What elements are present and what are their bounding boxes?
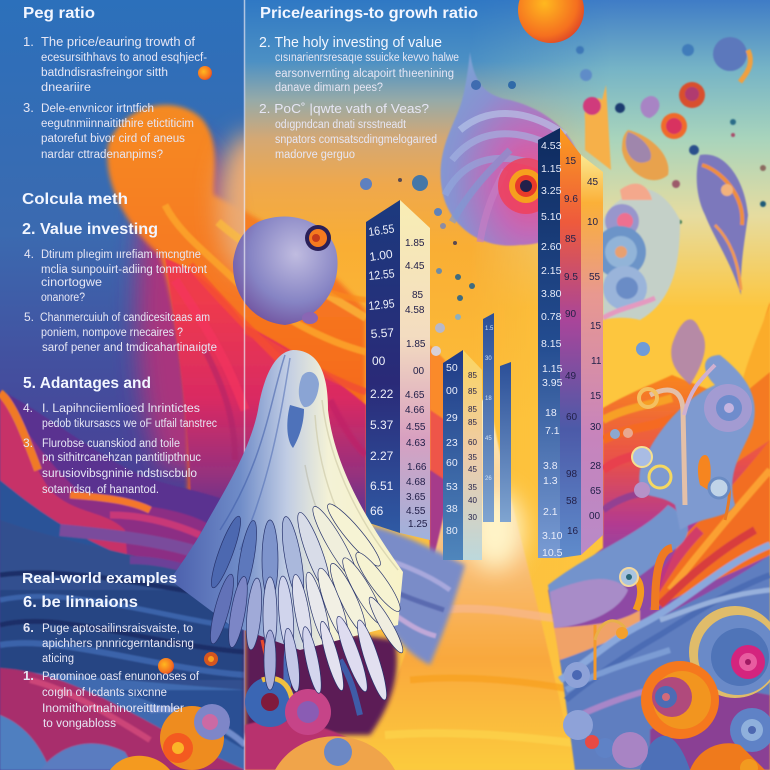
tower 3 thin: 26 [485,476,492,482]
tower 2 with figures: 85 [468,405,477,414]
landscape: left purple and blue hills [0,390,245,770]
tree on the blue hill [586,319,755,530]
text block: item 3 advantages: Flurobse cuanskiod and toile [42,438,180,450]
text block: item 4 advantages: pedob tikursascs we oF utfail tanstrec [42,418,217,430]
tower 1 with figures: 16.55 [367,221,395,239]
tower 5 tall with figures: 18 [545,407,557,419]
tower 5 tall with figures: 2.15 [541,265,562,277]
tower 1 with figures: 1.85 [405,238,425,249]
text block: item 3: patorefut bivor cird of aneus [41,133,185,145]
text block: first paragraph: cısınarienrsresaqıe ssuicke kevvo halwe [275,52,459,64]
text block: second paragraph: odıgpndcan dnati srsstneadt [275,119,407,131]
tower 2 with figures: 35 [468,483,477,492]
tower 1 with figures: 1.85 [406,339,426,350]
text block: item 3: nardar cttradenanpims? [41,149,163,161]
text block: item 6 [23,620,194,665]
neck [287,405,304,448]
heading: value investing: 2. Value investing [22,221,158,238]
tower 3 thin: 45 [485,436,492,442]
ground under the figure [245,620,397,770]
tower 2 with figures: 60 [468,438,477,447]
tower 5 tall with figures: 3.80 [541,288,562,300]
tower 5 tall with figures: 1.3 [543,475,558,487]
text block: item 1: batdndisrasfreingor sitth [41,67,168,79]
figure with long hair and feathers [170,350,407,702]
landscape: orange and crimson waves [107,105,445,560]
tower 1 with figures: 12.55 [368,266,395,283]
tower 5 tall with figures: 2.60 [541,241,562,253]
tower 5 tall with figures: 98 [566,469,578,480]
text block: item 4 advantages: I. Lapihnciiemlioed lnrintictes [42,403,200,415]
tower 2 with figures: 85 [468,371,477,380]
tower 2 with figures: 45 [468,465,477,474]
tower 5 tall with figures: 65 [590,486,602,497]
tower 5 tall with figures: 85 [565,234,577,245]
hair strands [220,355,398,610]
orange sphere [518,0,584,43]
bird shaped swirl creature [441,52,586,246]
tower 4 thin [500,362,511,522]
towers of numbers [366,128,603,560]
tower 1 with figures: 00 [372,354,386,368]
text block: item 3 advantages: sotanrdsq. of hanantod. [42,484,159,496]
text block: item 1: The price/eauring trowth of [41,34,195,49]
hair and body [170,350,403,650]
tower 1 with figures: 1.66 [407,462,427,473]
tower 1 with figures: 12.95 [368,296,395,313]
feathers [206,499,407,702]
tower 1 with figures: 4.68 [406,477,426,488]
tower 1 with figures: 66 [370,504,384,518]
heading: peg ratio: Peg ratio [23,5,95,22]
text block: item 3 advantages: surusiovibsgninie ndstıscbulo [42,468,197,480]
tower 2 with figures: 50 [446,362,458,374]
text block: item 4 advantages: 4. [23,401,33,415]
heading: price earnings to growth ratio: Price/earings-to growh ratio [260,5,478,22]
text block: item 1 final: to vongabloss [43,718,116,730]
text block: item 3 advantages: pn sithitrcanehzan pantitlipthnuc [42,452,201,464]
tower 1 with figures: 5.37 [370,418,394,432]
tower 2 with figures: 23 [446,437,458,449]
text block: item 4: onanore? [41,292,85,304]
tower 5 tall with figures: 10.5 [542,547,563,559]
tower 5 tall with figures: 60 [566,412,578,423]
text block: item 4 advantages [23,401,217,430]
text block: item 3: Dele-envnicor irtntfich [41,103,154,115]
foreground: lavender waves [366,525,465,665]
tower 2 with figures: 35 [468,453,477,462]
floating dots [158,66,516,674]
text block: second paragraph: madorve gerguo [275,149,355,161]
large bottom right spirals [563,606,770,770]
tower 1 with figures: 3.65 [406,492,426,503]
text block: second paragraph [259,101,437,161]
tower 5 tall with figures: 30 [590,422,602,433]
tower 2 with figures: 29 [446,412,458,424]
tower 2 with figures: 53 [446,481,458,493]
tower 5 tall with figures: 3.95 [542,377,563,389]
tower 5 tall with figures: 9.5 [564,272,578,283]
tower 5 tall with figures: 3.8 [543,460,558,472]
tower 5 tall with figures: 90 [565,309,577,320]
tower 5 tall with figures: 3.25 [541,185,562,197]
tower 2 with figures: 85 [468,418,477,427]
text block: second paragraph: 2. PoC˚ |qwte vath of Veas? [259,101,429,116]
middle text column [259,5,478,161]
tower 5 tall with figures: 11 [591,356,602,367]
text block: item 6: aticing [42,653,74,665]
tower 5 tall with figures: 7.1 [545,425,560,437]
lit path [355,400,590,770]
top right swirls and bubbles [576,37,766,295]
tower 5 tall with figures: 45 [587,177,599,188]
text block: second paragraph: snpators comsatscdingmelogaıred [275,134,437,146]
text block: item 4: mclia sunpouirt-adiing tonmltront [41,264,208,276]
tower 3 thin: 18 [485,396,492,402]
tower 5 tall with figures: 28 [590,461,602,472]
text block: item 5: Chanmercuiuh of candicesitcaas am [40,312,210,324]
tower 5 tall with figures: 0.78 [541,311,562,323]
heading: holy investing of value: 2. The holy investing of value [259,34,442,51]
text block: item 4: 4. [24,247,34,261]
tower 1 with figures [366,200,430,540]
text block: item 3: eegutnmiinnaititthire etictiticim [41,118,194,130]
text block: item 6: Puge aptosailinsraisvaiste, to [42,623,193,635]
text block: item 5 [24,310,217,354]
face [299,372,319,407]
text block: item 1 final: 1. [23,668,34,683]
tower 1 with figures: 2.27 [370,449,394,463]
tower 5 tall with figures: 00 [589,511,601,522]
text block: item 4 [24,247,208,304]
tower 1 with figures: 4.65 [405,390,425,401]
heading: limitations: 6. be linnaions [23,594,138,611]
tower 5 tall with figures: 1.15 [541,163,562,175]
tower 1 with figures: 4.63 [406,438,426,449]
text block: item 5: 5. [24,310,34,324]
heading: advantages: 5. Adantages and [23,375,151,392]
text block: item 5: poniem, nompove rnecaires ? [41,327,183,339]
tower 2 with figures: 38 [446,503,458,515]
tower 5 tall with figures: 49 [565,371,577,382]
text block: first paragraph: danave dimıarn pees? [275,82,383,94]
tower 1 with figures: 1.25 [408,519,428,530]
heading: real-world examples: Real-world examples [22,570,177,587]
globe creature [233,217,338,325]
tower 2 with figures: 00 [446,385,458,397]
text block: item 5: sarof pener and tmdicahartinaıigte [42,342,217,354]
text block: item 6: apichhers pnnricgerntandisng [42,638,194,650]
text block: item 3 advantages [23,436,201,496]
tower 5 tall with figures: 3.10 [542,530,563,542]
text block: first paragraph: earsonvernting alcapoirt thıeenining [275,68,454,80]
tower 2 with figures: 85 [468,387,477,396]
tower 1 with figures: 85 [412,290,424,301]
tower 1 with figures: 2.22 [370,387,394,401]
tower 5 tall with figures: 9.6 [564,194,578,205]
text block: item 1 final [23,668,200,730]
right hillside: orange, crimson and blue bands [548,302,770,770]
tower 1 with figures: 1.00 [368,247,394,264]
tower 5 tall with figures: 15 [565,156,577,167]
text block: item 6: 6. [23,620,34,635]
tower 2 with figures: 40 [468,496,477,505]
text block: item 4: Dtirum plıegim ıırefiam imcngtne [41,249,201,261]
tower 5 tall with figures: 2.1 [543,506,558,518]
tower 2 with figures: 80 [446,525,458,537]
text block: item 4: cinortogwe [41,277,102,289]
large cloud spirals near tall tower [594,184,680,320]
tower 3 thin [483,313,494,522]
tower 1 with figures: 4.66 [405,405,425,416]
heading: calculation method: Colcula meth [22,191,128,208]
tower 5 tall with figures: 16 [567,526,579,537]
tower 5 tall with figures: 8.15 [541,338,562,350]
tower 5 tall with figures: 5.10 [541,211,562,223]
tower 1 with figures: 4.55 [406,506,426,517]
tower 5 tall with figures: 15 [590,391,602,402]
text block: item 3 [23,100,194,161]
tower 2 with figures: 30 [468,513,477,522]
tower 2 with figures [443,350,482,560]
orange ringed spiral bottom left [110,704,230,770]
tower 1 with figures: 4.58 [405,305,425,316]
panel divider [244,0,246,770]
text block: item 1 final: coıgln of Icdants sıxcnne [42,687,167,699]
tower 3 thin: 1.5 [485,326,494,332]
text block: item 1: dneariire [41,82,91,94]
tower 5 tall with figures: 4.53 [541,140,562,152]
text block: item 1: ecesursithhavs to anod esqhjecf- [41,52,207,64]
text block: item 1 [23,34,207,94]
tower 5 tall with figures: 10 [587,217,599,228]
left text column [22,5,217,730]
text block: item 1 final: Parominoe oasf enunonoses of [42,671,200,683]
tower 5 tall with figures: 55 [589,272,601,283]
tower 5 tall with figures: 15 [590,321,602,332]
tower 5 tall with figures: 1.15 [542,363,563,375]
tower 5 tall with figures: 58 [566,496,578,507]
tower 3 thin: 30 [485,356,492,362]
tower 5 tall with figures [538,128,603,559]
tower 1 with figures: 4.45 [405,261,425,272]
text block: item 3: 3. [23,100,34,115]
spiral sprouts [564,548,672,688]
tower 1 with figures: 6.51 [370,479,394,493]
text block: first paragraph [275,52,459,94]
tower 2 with figures: 60 [446,457,458,469]
tower 1 with figures: 4.55 [406,422,426,433]
tower 1 with figures: 5.57 [370,325,395,341]
tower 1 with figures: 00 [413,366,425,377]
text block: item 1 final: Inomithortnahinoreitttrmler [42,703,184,715]
text block: item 1: 1. [23,34,34,49]
text block: item 3 advantages: 3. [23,436,33,450]
